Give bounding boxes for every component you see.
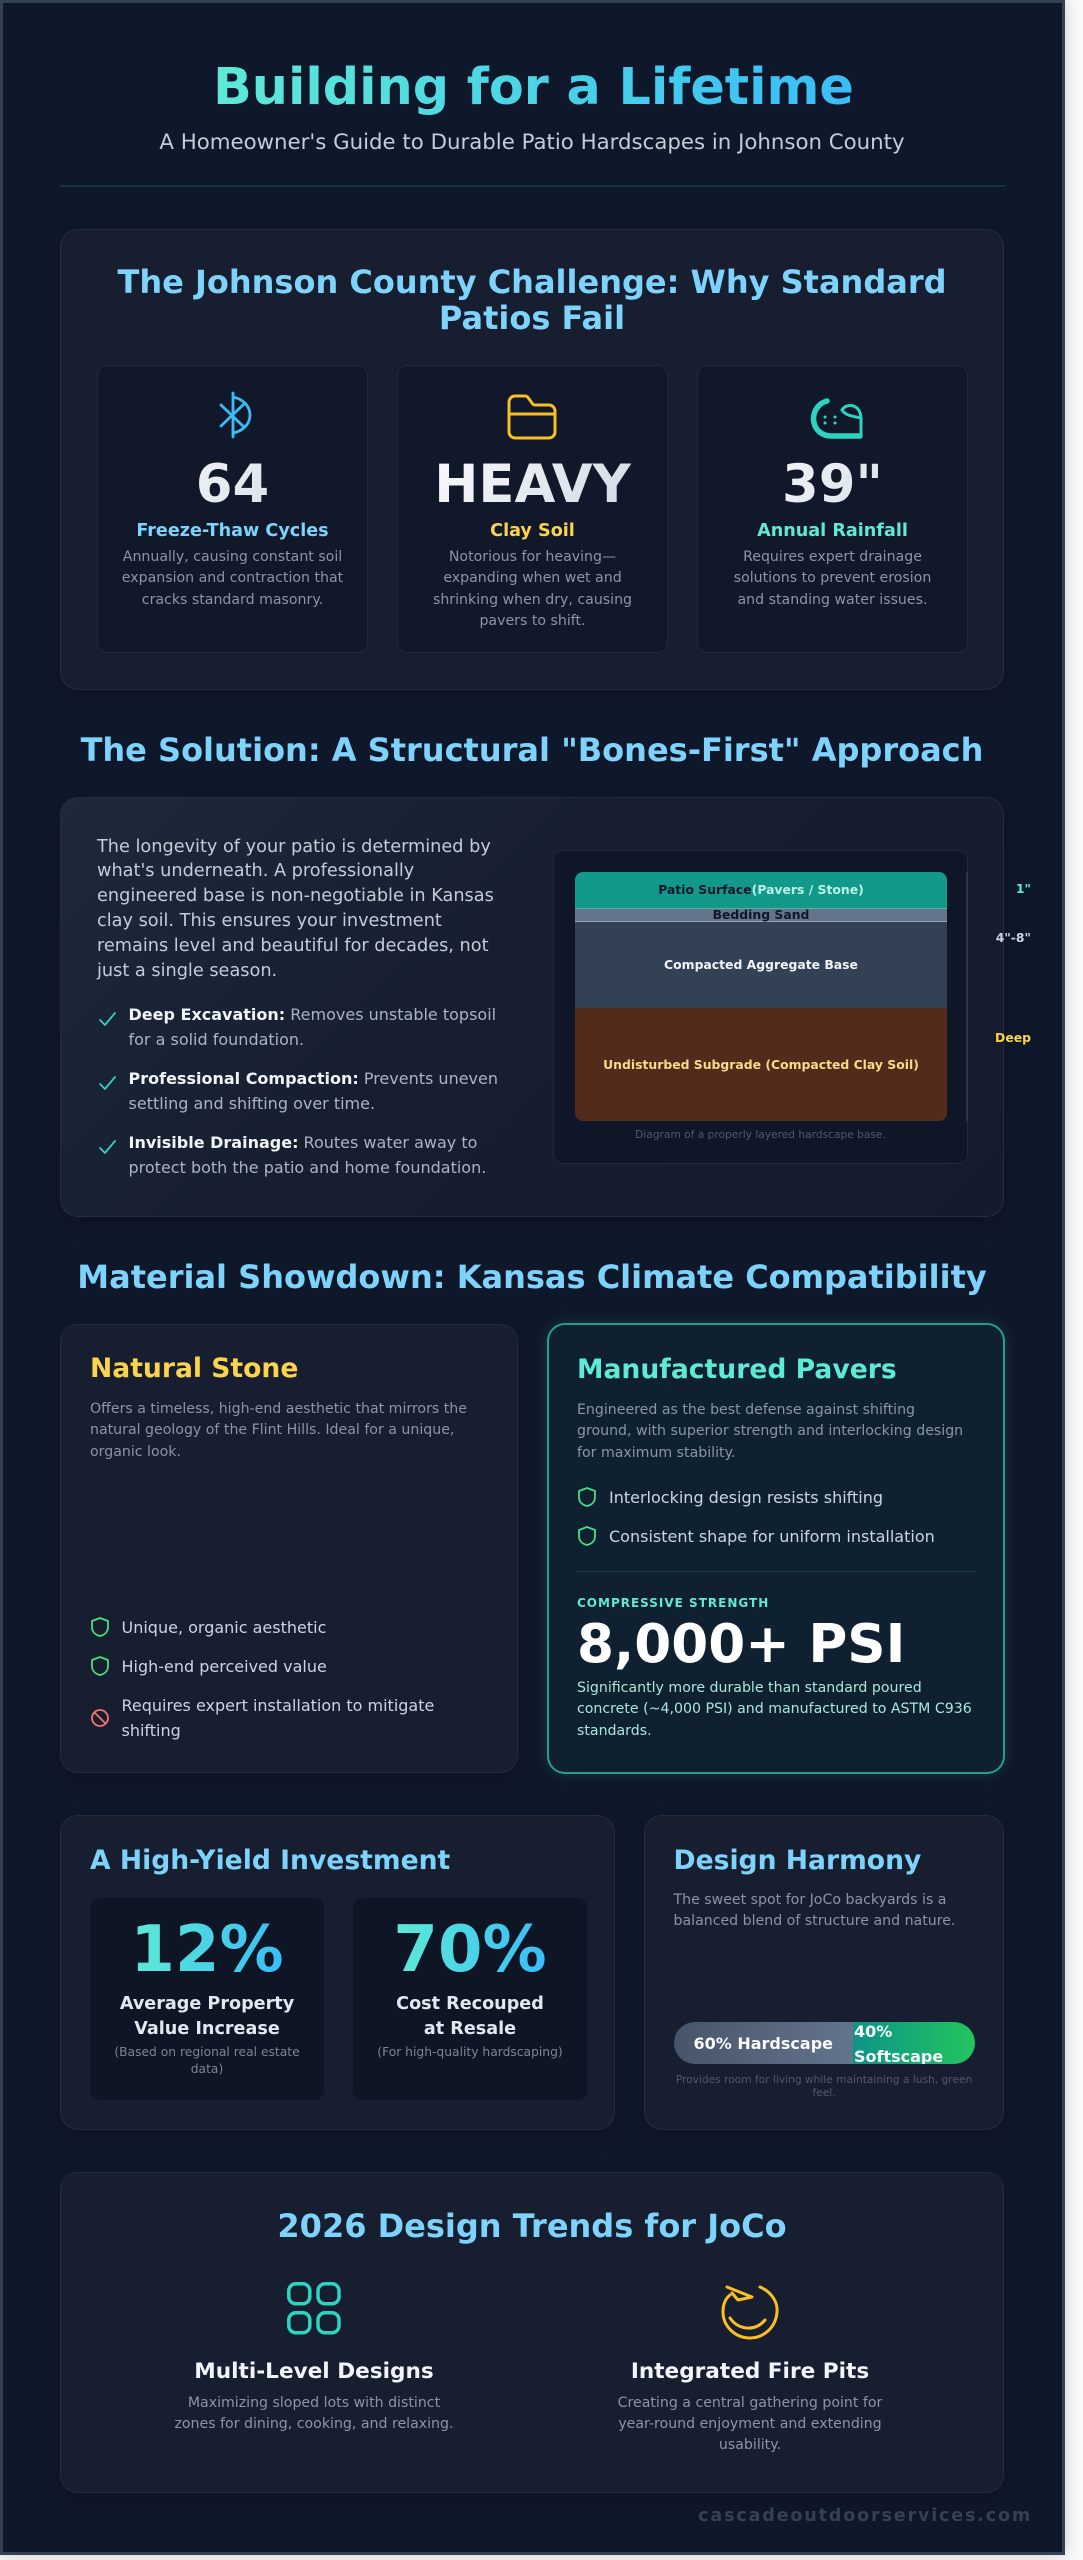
description: cracks standard masonry. xyxy=(142,592,323,608)
panel: high-yield investment xyxy=(60,1815,615,2130)
list item: professional compaction xyxy=(99,1069,498,1113)
stat: 64 xyxy=(97,453,368,517)
text: shifting xyxy=(122,1721,181,1740)
bar: hardscape and softscape split xyxy=(674,2022,975,2064)
text xyxy=(128,1069,498,1113)
label: freeze-thaw cycles: Freeze-Thaw Cycles xyxy=(136,521,329,541)
trend: multi-level designs xyxy=(114,2280,514,2450)
stat: 64: 64 xyxy=(196,454,269,515)
description: Creating a central gathering point for xyxy=(618,2395,882,2411)
subtitle: A Homeowner's Guide to Durable Patio Hardscapes in Johnson County xyxy=(159,130,905,154)
description: Engineered as the best defense against shifting xyxy=(577,1402,915,1418)
pro: consistent shape xyxy=(578,1526,935,1546)
pro: unique aesthetic xyxy=(91,1617,326,1637)
segment: softscape: 40% xyxy=(854,2022,892,2040)
caption: Diagram of a properly layered hardscape base. xyxy=(635,1128,886,1141)
stat card: 70% xyxy=(353,1898,587,2100)
paragraph: The longevity of your patio is determined by xyxy=(97,836,491,856)
description: and standing water issues. xyxy=(738,592,927,608)
text: Professional Compaction: Prevents uneven xyxy=(128,1069,498,1088)
note: data) xyxy=(191,2062,223,2076)
label: cost recouped: Cost Recouped xyxy=(396,1994,544,2014)
stat: 70%: 70% xyxy=(393,1913,547,1987)
text: protect both the patio and home foundation. xyxy=(128,1158,486,1177)
description: solutions to prevent erosion xyxy=(734,570,931,586)
icon: shield xyxy=(578,1526,596,1546)
caption xyxy=(644,2073,1004,2099)
panel: manufactured pavers xyxy=(547,1323,1005,1774)
icon: grid xyxy=(287,2282,341,2335)
label: property value xyxy=(120,1994,294,2039)
description: strength: Significantly more durable than standard poured xyxy=(577,1680,922,1696)
layer: aggregate base: Compacted Aggregate Base xyxy=(664,957,858,972)
description: The sweet spot for JoCo backyards is a xyxy=(674,1892,946,1908)
description: Offers a timeless, high-end aesthetic that mirrors the xyxy=(90,1401,467,1417)
title: Building for a Lifetime xyxy=(213,57,854,116)
layer: subgrade xyxy=(575,1008,947,1121)
description xyxy=(734,548,931,608)
heading: material showdown: Material Showdown: Kansas Climate Compatibility xyxy=(77,1258,987,1296)
description xyxy=(577,1402,963,1461)
footer: website: cascadeoutdoorservices.com xyxy=(698,2506,1032,2526)
stat card: rainfall xyxy=(697,365,968,653)
caption: Provides room for living while maintaining a lush, green xyxy=(676,2073,972,2086)
paragraph: what's underneath. A professionally xyxy=(97,861,414,881)
title: Multi-Level Designs xyxy=(194,2359,434,2384)
panel: design trends xyxy=(60,2172,1004,2493)
paragraph: just a single season. xyxy=(97,961,277,981)
stat card: clay soil xyxy=(397,365,668,653)
icon: shield xyxy=(91,1617,109,1637)
heading: investment: A High-Yield Investment xyxy=(90,1845,450,1876)
depth: 1 inch: 1" xyxy=(1016,881,1031,896)
label: cost recouped xyxy=(396,1994,544,2039)
description xyxy=(433,548,632,629)
depth: 4 to 8 inches: 4"-8" xyxy=(996,930,1031,945)
panel: the Johnson County challenge xyxy=(60,229,1004,690)
segment: hardscape: 60% Hardscape xyxy=(693,2034,833,2053)
paragraph: engineered base is non-negotiable in Kansas xyxy=(97,886,494,906)
icon: ban xyxy=(91,1709,109,1727)
description: shrinking when dry, causing xyxy=(433,592,632,608)
stat: 39 inches xyxy=(697,453,968,517)
heading: the solution: The Solution: A Structural "Bones-First" Approach xyxy=(81,731,983,769)
description: expansion and contraction that xyxy=(122,570,343,586)
layer: subgrade: Undisturbed Subgrade (Compacted Clay Soil) xyxy=(603,1057,919,1072)
description: usability. xyxy=(719,2437,781,2453)
text: settling and shifting over time. xyxy=(128,1094,375,1113)
description: strength: concrete (~4,000 PSI) and manufactured to ASTM C936 xyxy=(577,1701,972,1717)
stat: heavy: HEAVY xyxy=(434,454,631,515)
description: pavers to shift. xyxy=(479,613,586,629)
layer: bedding sand: Bedding Sand xyxy=(713,907,809,922)
label: clay soil: Clay Soil xyxy=(490,521,575,541)
text xyxy=(128,1005,496,1049)
description: Annually, causing constant soil xyxy=(123,548,342,564)
description: natural geology of the Flint Hills. Ideal for a unique, xyxy=(90,1422,454,1438)
description: organic look. xyxy=(90,1444,181,1460)
icon: check xyxy=(99,1140,116,1154)
description: zones for dining, cooking, and relaxing. xyxy=(174,2416,454,2432)
heading: design trends: 2026 Design Trends for JoCo xyxy=(277,2207,787,2245)
list item: deep excavation xyxy=(99,1005,496,1049)
title: Integrated Fire Pits xyxy=(631,2359,869,2384)
note: (Based on regional real estate xyxy=(114,2045,300,2059)
panel: design harmony xyxy=(644,1815,1004,2130)
label: cost recouped: at Resale xyxy=(424,2019,516,2039)
description xyxy=(673,1892,955,1929)
description: balanced blend of structure and nature. xyxy=(674,1913,955,1929)
text: for a solid foundation. xyxy=(128,1030,304,1049)
heading: challenge xyxy=(118,263,946,337)
panel: natural stone xyxy=(60,1324,518,1773)
label: annual rainfall: Annual Rainfall xyxy=(757,521,908,541)
text: Interlocking design resists shifting xyxy=(609,1488,883,1507)
heading: challenge: Patios Fail xyxy=(439,299,625,337)
text: Unique, organic aesthetic xyxy=(122,1618,326,1637)
stat card: 12% xyxy=(90,1898,324,2100)
text: Requires expert installation to mitigate xyxy=(122,1696,434,1715)
label: property value: Average Property xyxy=(120,1994,294,2014)
text xyxy=(128,1133,486,1177)
text: Consistent shape for uniform installation xyxy=(609,1527,935,1546)
layer: aggregate base xyxy=(575,922,947,1008)
icon: check xyxy=(99,1076,116,1090)
icon: shield xyxy=(578,1487,596,1507)
paragraph: remains level and beautiful for decades, not xyxy=(97,936,489,956)
icon: fire pit xyxy=(715,2275,785,2345)
text: Deep Excavation: Removes unstable topsoil xyxy=(128,1005,496,1024)
heading: manufactured pavers: Manufactured Pavers xyxy=(577,1354,897,1385)
segment: hardscape xyxy=(674,2022,853,2064)
pro: interlocking xyxy=(578,1487,883,1507)
list item: invisible drainage xyxy=(99,1133,486,1177)
diagram layers xyxy=(575,872,947,1121)
stat card: freeze-thaw xyxy=(97,365,368,653)
caption: feel. xyxy=(812,2086,836,2099)
text xyxy=(122,1696,434,1740)
stat: 12%: 12% xyxy=(130,1913,284,1987)
icon: snowflake xyxy=(220,392,252,438)
description: ground, with superior strength and interlocking design xyxy=(577,1423,963,1439)
label: compressive strength: COMPRESSIVE STRENGTH xyxy=(577,1596,769,1610)
description: for maximum stability. xyxy=(577,1445,735,1461)
description: strength: standards. xyxy=(577,1723,652,1739)
description xyxy=(114,2393,514,2435)
description: strength xyxy=(577,1680,972,1739)
description: Notorious for heaving— xyxy=(449,548,616,564)
pro: perceived value xyxy=(91,1656,327,1676)
diagram: layered hardscape base xyxy=(553,850,968,1164)
segment: softscape xyxy=(853,2022,975,2064)
trend: integrated fire pits xyxy=(550,2280,950,2450)
icon: rain gauge xyxy=(810,398,863,439)
stat: 8,000+ PSI: 8,000+ PSI xyxy=(577,1613,905,1675)
note: (For high-quality hardscaping) xyxy=(377,2045,563,2059)
description: Requires expert drainage xyxy=(743,548,922,564)
layer: bedding sand xyxy=(575,908,947,922)
description: year-round enjoyment and extending xyxy=(618,2416,882,2432)
icon: folder xyxy=(508,394,556,440)
note xyxy=(114,2045,300,2076)
description xyxy=(122,548,343,608)
text: Invisible Drainage: Routes water away to xyxy=(128,1133,477,1152)
layer: patio surface: Patio Surface(Pavers / Stone) xyxy=(658,882,864,897)
layer: patio surface xyxy=(575,872,947,908)
heading: natural stone: Natural Stone xyxy=(90,1353,298,1384)
description: expanding when wet and xyxy=(443,570,622,586)
stat: heavy xyxy=(397,453,668,517)
paragraph: clay soil. This ensures your investment xyxy=(97,911,442,931)
depth labels xyxy=(995,881,1031,1045)
stat: 39 inches: 39" xyxy=(782,454,883,515)
heading: challenge: The Johnson County Challenge: Why Standard xyxy=(118,263,946,301)
heading: design harmony: Design Harmony xyxy=(674,1845,921,1876)
text: High-end perceived value xyxy=(122,1657,327,1676)
description xyxy=(90,1401,467,1460)
icon: shield xyxy=(91,1656,109,1676)
paragraph xyxy=(96,836,494,981)
description xyxy=(550,2393,950,2457)
panel: the solution xyxy=(60,797,1004,1217)
description: Maximizing sloped lots with distinct xyxy=(188,2395,440,2411)
label: property value: Value Increase xyxy=(134,2019,280,2039)
depth: deep: Deep xyxy=(995,1030,1031,1045)
icon: check xyxy=(99,1012,116,1026)
con: expert installation xyxy=(91,1696,434,1740)
